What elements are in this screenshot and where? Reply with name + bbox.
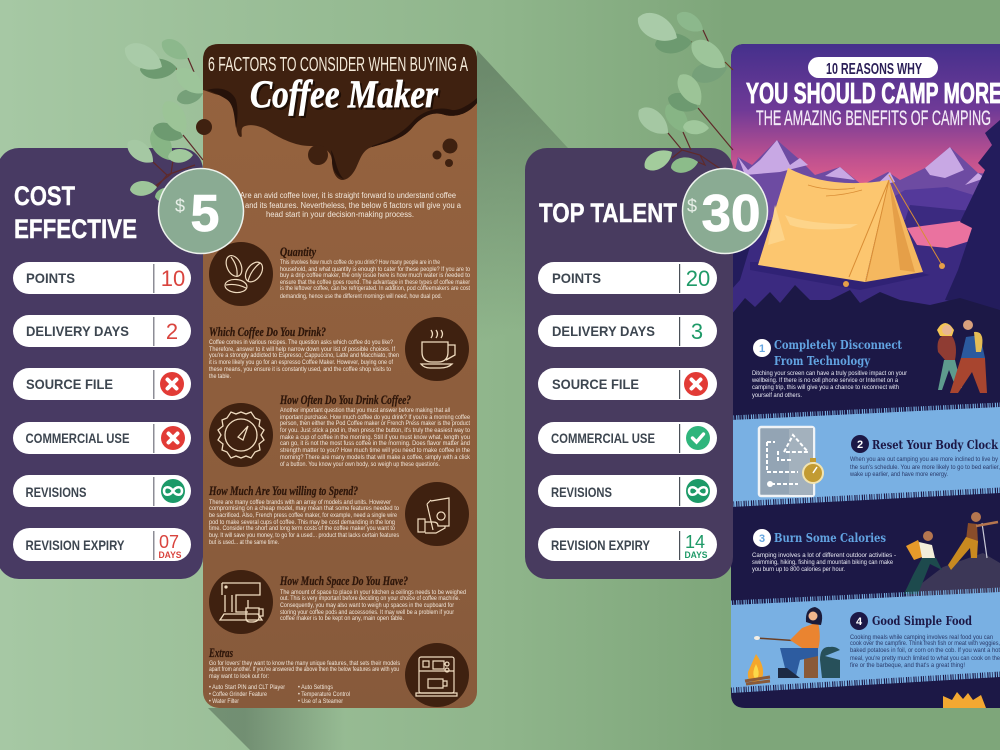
section 2: reset your body clock	[849, 435, 1000, 478]
section 1: disconnect from technology: Completely Disconnect	[774, 338, 902, 352]
row: delivery days: DELIVERY DAYS	[26, 323, 129, 339]
section 4: good simple food	[850, 612, 1000, 669]
section: extras: • Coffee Grinder Feature	[209, 691, 267, 698]
section: which coffee: you're a strongly addicted to Espresso, Cappuccino, Latte and Macchiato, then	[209, 352, 399, 359]
icon: right eucalyptus branch	[633, 7, 733, 175]
section: quantity: demanding, hence use the different mornings will need, how dual pod.	[280, 293, 442, 300]
row: commercial use: COMMERCIAL USE	[26, 430, 130, 446]
section 1: disconnect from technology: From Technology	[774, 354, 871, 368]
section: space: out. This is very important before deciding on your choice of coffee machine.	[280, 595, 460, 602]
row: points	[538, 262, 717, 294]
row: source file: SOURCE FILE	[552, 376, 639, 392]
row: revision expiry: 14	[685, 532, 705, 552]
row: revision expiry	[538, 528, 717, 561]
row: points: 20	[686, 266, 710, 291]
section: which coffee: it is more likely you go for an espresso Coffee Maker. However, buying one of	[209, 359, 393, 366]
section: extras: • Use of a Steamer	[298, 698, 344, 705]
section: how often: person, then either the Pod Coffee maker or French Press maker is the product	[280, 420, 470, 427]
row: points: POINTS	[26, 270, 75, 286]
panel: top talent pricing card	[525, 148, 733, 579]
section: quantity: This involves how much coffee do you drink? How many people are in the	[280, 259, 440, 266]
row: revision expiry: REVISION EXPIRY	[26, 537, 125, 553]
section: budget: There are many coffee brands with an array of models and units. However	[209, 499, 392, 506]
section: which coffee	[209, 317, 469, 381]
row: commercial use	[13, 422, 191, 454]
panel: coffee maker infographic	[196, 44, 477, 708]
section 3: burn some calories: Camping involves a lot of different outdoor activities -	[752, 552, 896, 559]
section 3: burn some calories: swimming, hiking, fishing and mountain biking can make	[752, 559, 893, 566]
section 3: burn some calories: Burn Some Calories	[774, 531, 886, 545]
section: how often	[209, 392, 471, 468]
coffee drip header	[196, 44, 477, 180]
row: revision expiry: DAYS	[158, 550, 182, 560]
illustration: climbers	[900, 512, 1000, 600]
row: revisions	[538, 475, 717, 507]
section: which coffee: Which Coffee Do You Drink?	[209, 324, 326, 339]
section 1: disconnect from technology: camping trip, this will give you a chance to reconnect with	[752, 384, 899, 391]
section: budget: How Much Are You willing to Spend?	[208, 483, 358, 498]
section: quantity: ensure that the coffee goes round. The advantage in these types of coffee maker	[280, 279, 471, 286]
blue band 2	[731, 591, 1000, 693]
row: source file	[13, 368, 191, 400]
row: revisions: REVISIONS	[551, 484, 612, 500]
section 2: reset your body clock: 2	[857, 439, 863, 451]
row: revisions: REVISIONS	[26, 484, 86, 500]
row: delivery days	[538, 315, 717, 347]
section 3: burn some calories	[752, 529, 896, 573]
section: space	[209, 570, 466, 634]
intro text	[240, 191, 462, 219]
section: extras: • Temperature Control	[298, 691, 350, 698]
badge: price 30 dollars	[682, 168, 768, 254]
badge: price 30 dollars: $	[687, 196, 697, 216]
panel: camping infographic	[731, 44, 1000, 708]
long shadow: coffee card bottom	[208, 708, 477, 750]
section: space: storing your coffee pods and accessories. It may well be a problem if your	[280, 609, 455, 616]
row: source file	[538, 368, 717, 400]
icon: left eucalyptus branch	[120, 35, 209, 204]
section: quantity: Quantity	[280, 244, 316, 259]
section: quantity: buy a drip coffee maker, the only issue here is how much water is needed to	[280, 272, 470, 279]
heading: cost effective: EFFECTIVE	[14, 214, 137, 244]
section 1: disconnect from technology: wellbeing. If there is no cell phone service or Internet on a	[751, 377, 898, 384]
section 1: disconnect from technology: 1	[759, 343, 765, 355]
section: how often: important purchase. How much coffee do you drink? If you're a morning coffee	[280, 414, 470, 421]
section: budget: pod to make several cups of coffee. This may be cost demanding in the long	[209, 519, 395, 526]
badge: price 30 dollars: 30	[702, 185, 760, 243]
section 1: disconnect from technology: Ditching your screen can have a truly positive impact on your	[752, 370, 908, 377]
section: extras: may want to look out for:	[209, 673, 269, 680]
section: how often: can go, it is not the most fuss coffee in the morning. Does flavor matter and	[280, 440, 470, 447]
section: space: Consequently, you may also want to weigh up spaces in the cupboard for	[280, 602, 455, 609]
long shadow: coffee card right	[477, 50, 700, 400]
section: extras: Go for lovers' they want to know the many unique features, that sets their models	[209, 660, 400, 667]
section: quantity: household, and what quantity is enough to cater for these people? If you are to	[280, 266, 470, 273]
section 3: burn some calories: 3	[759, 533, 765, 545]
section: how often: strength matter to you? How much time will you need to make coffee in the	[280, 447, 470, 454]
section: extras: • Auto Start PIN and CLT Player	[209, 684, 286, 691]
section: extras: apart from another. If you've answered the above then the below features are with you	[209, 666, 399, 673]
section 3: burn some calories: you burn up to 800 calories per hour.	[752, 566, 845, 573]
section: how often: for you. Just stick a pod in, then press the button, it's truly the easiest way to	[280, 427, 470, 434]
heading: cost effective: COST	[14, 181, 75, 211]
section: quantity: is the leftover coffee, can be refrigerated. In addition, pod coffeemakers are cost	[280, 285, 470, 292]
section: how often: of a button. You know your own body, so weigh up these questions.	[280, 461, 440, 468]
row: commercial use: COMMERCIAL USE	[551, 430, 655, 446]
panel: cost effective pricing card	[0, 148, 203, 579]
title: 6 FACTORS TO CONSIDER WHEN BUYING A	[208, 54, 468, 76]
section 1: disconnect from technology: yourself and others.	[752, 392, 802, 399]
row: points: 10	[161, 266, 185, 291]
row: revision expiry	[13, 528, 191, 561]
section: extras: • Water Filter	[209, 698, 240, 705]
section 2: reset your body clock: wake up earlier, and have more energy.	[849, 471, 948, 478]
row: commercial use	[538, 422, 717, 454]
title: coffee maker: Coffee Maker	[252, 75, 441, 118]
row: delivery days: DELIVERY DAYS	[552, 323, 655, 339]
section: how often: make a cup of coffee in the morning. Still if you must know what, length you	[280, 434, 470, 441]
section: how often: Another important question that you must answer before making that all	[280, 407, 450, 414]
sky	[731, 44, 1000, 190]
section: space: How Much Space Do You Have?	[279, 573, 408, 588]
intro text: head start in your decision-making process.	[266, 210, 414, 219]
section: extras	[208, 643, 469, 707]
illustration: hikers	[937, 320, 987, 393]
heading: cost effective	[14, 181, 137, 244]
icon: sun at base	[943, 692, 986, 708]
section: budget: but is used... at the same time.	[209, 539, 279, 546]
mountains	[731, 140, 1000, 235]
row: delivery days: 3	[691, 319, 703, 344]
section: budget	[208, 482, 469, 546]
tent	[750, 168, 945, 290]
badge: price 5 dollars: 5	[191, 185, 219, 243]
section: space: coffee maker is to be kept on any, main open table.	[280, 615, 404, 622]
section 4: good simple food: 4	[856, 616, 863, 628]
section: how often: How Often Do You Drink Coffee?	[279, 392, 411, 407]
intro text: Are an avid coffee lover, it is straight forward to understand coffee	[240, 191, 457, 200]
section 4: good simple food: fire or the barbeque, and that's a great thing!	[850, 662, 965, 669]
row: points: POINTS	[552, 270, 601, 286]
icon: map and stopwatch	[759, 427, 824, 496]
heading: 10 reasons why: 10 REASONS WHY	[826, 61, 922, 78]
row: revision expiry: 07	[159, 532, 179, 552]
section: space: The amount of space to place in your kitchen a ceilings needs to be weighed	[280, 589, 466, 596]
section: budget: compromising on a cheap model, may mean that some features needed to	[209, 505, 399, 512]
section 4: good simple food: Good Simple Food	[872, 614, 972, 628]
intro text: and its features. Nevertheless, the below 6 factors will give you a	[245, 201, 462, 210]
badge: price 5 dollars	[158, 168, 244, 254]
row: revision expiry: DAYS	[684, 550, 708, 560]
heading: top talent: TOP TALENT	[539, 198, 677, 228]
section: extras: • Auto Settings	[298, 684, 333, 691]
section: which coffee: Therefore, answer to it will help narrow down your list of possible choices. If	[209, 346, 395, 353]
row: revisions	[13, 475, 191, 507]
row: delivery days	[13, 315, 191, 347]
illustration: campfire woman	[745, 607, 840, 684]
badge: price 5 dollars: $	[175, 196, 185, 216]
ground	[731, 205, 1000, 320]
section 1: disconnect from technology	[751, 338, 908, 399]
section: extras: Extras	[208, 645, 233, 660]
section: which coffee: the table.	[209, 373, 231, 380]
section: budget: time. Consider the short and long term costs of the coffee maker you want to	[209, 525, 395, 532]
section: how often: morning? There are many models that will make a coffee, simply with a click	[280, 454, 471, 461]
section: budget: be sacrificed. Also, French press coffee maker, for example, need a single wire	[209, 512, 397, 519]
section: which coffee: these means, you ensure it is constantly used, and the coffee shop visits to	[209, 366, 391, 373]
heading pill	[808, 57, 938, 78]
section: which coffee: Coffee comes in various recipes. The question asks which coffee do you like?	[209, 339, 393, 346]
row: delivery days: 2	[166, 319, 178, 344]
trees	[731, 120, 1000, 310]
row: revision expiry: REVISION EXPIRY	[551, 537, 651, 553]
section: quantity	[209, 242, 471, 306]
blue band 1	[731, 406, 1000, 507]
row: points	[13, 262, 191, 294]
lake	[907, 217, 990, 248]
foreground grass	[731, 285, 1000, 345]
row: source file: SOURCE FILE	[26, 376, 113, 392]
section: budget: buy. It will save you money, to go for a used... product that lacks certain features	[209, 532, 399, 539]
title: coffee maker: Coffee Maker	[250, 73, 439, 116]
